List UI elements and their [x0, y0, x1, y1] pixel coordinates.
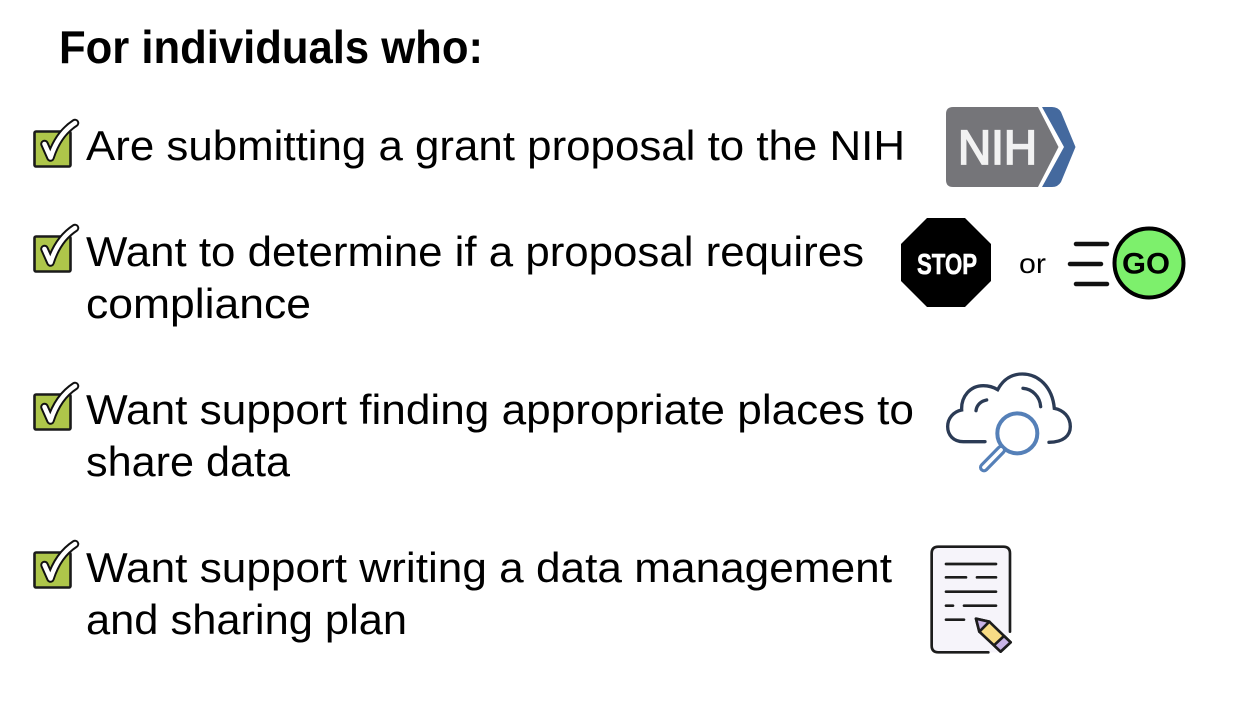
icon: checkbox 4	[34, 544, 75, 588]
icon: stop sign	[901, 218, 991, 307]
item 4: management and sharing plan	[34, 544, 892, 643]
text: data management plan: and sharing plan	[86, 596, 407, 643]
text: determine compliance: Want to determine if a proposal requires	[86, 228, 864, 275]
icon: checkbox 3	[34, 386, 75, 430]
text: determine compliance: compliance	[86, 280, 311, 327]
icon: go button	[1070, 228, 1184, 298]
text: share data: Want support finding appropriate places to	[86, 386, 914, 433]
item 2: determine compliance	[34, 228, 864, 327]
icon: checkbox 1	[34, 123, 75, 166]
heading: For individuals who:	[59, 21, 483, 73]
icon: stop sign: STOP	[917, 249, 977, 281]
item 1: NIH grant proposal	[34, 122, 905, 169]
icon: checkbox 2	[34, 228, 75, 272]
text: share data: share data	[86, 438, 291, 485]
text: data management plan: Want support writing a data management	[86, 544, 892, 591]
text: grant proposal: Are submitting a grant proposal to the NIH	[86, 122, 905, 169]
icon: NIH logo	[946, 107, 1076, 187]
icon: cloud with magnifier	[948, 374, 1070, 467]
item 3: places to share data	[34, 386, 914, 485]
icon: NIH logo: NIH	[958, 122, 1037, 175]
icon: document with pencil	[932, 547, 1011, 652]
text: or: or	[1019, 248, 1046, 279]
icon: go button: GO	[1122, 248, 1170, 280]
